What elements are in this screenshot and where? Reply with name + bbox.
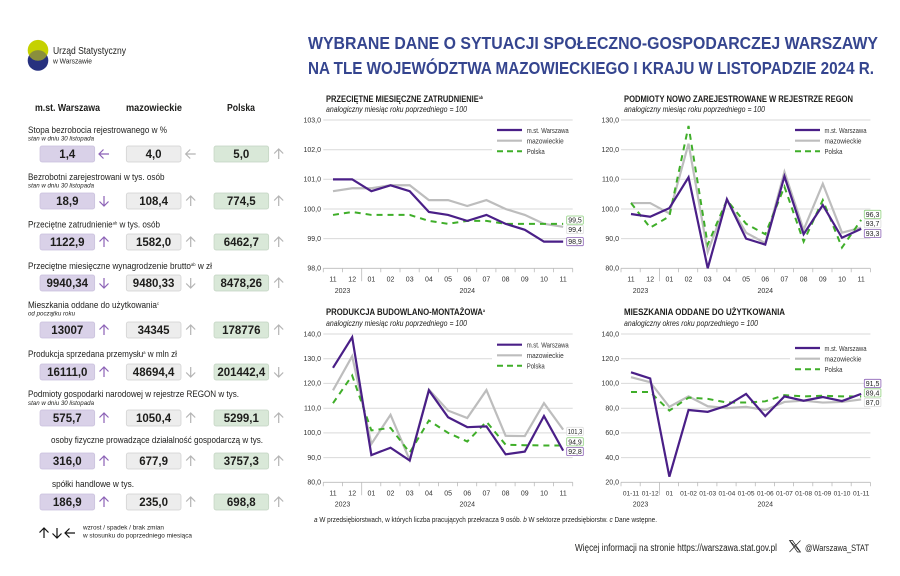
x axis labels: 11 — [858, 276, 865, 284]
x axis labels: 06 — [463, 276, 471, 284]
x axis labels: 05 — [444, 276, 452, 284]
y axis labels: 101,0 — [303, 177, 321, 184]
x axis labels: 01-04 — [718, 490, 736, 498]
chart: produkcja budowlano-montażowa — [303, 307, 583, 508]
chart title: analogiczny okres roku poprzedniego = 100 — [624, 319, 759, 328]
y axis labels: 80,0 — [605, 406, 619, 412]
legend — [497, 126, 569, 156]
row: stopa bezrobocia: stan w dniu 30 listopada — [28, 136, 94, 142]
x axis labels: 2024 — [758, 288, 773, 295]
y axis labels: 103,0 — [303, 117, 321, 124]
row: wynagrodzenie — [28, 261, 283, 291]
row: spółki handlowe: 186,9 — [53, 497, 82, 509]
x axis labels — [329, 490, 567, 508]
row: stopa bezrobocia: 5,0 — [233, 149, 249, 161]
row: bezrobotni: 774,5 — [227, 196, 256, 208]
x axis labels: 03 — [406, 490, 414, 498]
x axis labels: 01-08 — [795, 490, 812, 498]
x axis labels: 2023 — [335, 288, 350, 295]
x axis labels: 02 — [387, 276, 394, 284]
y axis labels: 110,0 — [602, 177, 619, 184]
social handle: @Warszawa_STAT — [805, 543, 869, 553]
legend — [795, 126, 866, 156]
end value labels — [864, 210, 881, 238]
y axis labels: 102,0 — [303, 147, 321, 154]
x axis labels: 01-06 — [757, 490, 774, 498]
y axis labels: 100,0 — [601, 206, 619, 213]
logo — [28, 40, 127, 71]
legend — [497, 340, 569, 370]
row: mieszkania: 34345 — [138, 325, 170, 337]
x axis labels: 09 — [521, 490, 529, 498]
x axis labels: 01-12 — [642, 490, 659, 498]
arrow legend: wzrost / spadek / brak zmian — [82, 524, 164, 532]
chart: przeciętne miesięczne zatrudnienie — [303, 94, 583, 295]
x axis labels: 02 — [387, 490, 394, 498]
row: osoby fizyczne: osoby fizyczne prowadzące działalność gospodarczą w tys. — [51, 435, 263, 445]
y axis labels: 130,0 — [303, 356, 321, 363]
chart: mieszkania oddane do użytkowania — [601, 307, 881, 508]
x axis labels: 01-07 — [776, 490, 793, 498]
y axis labels: 60,0 — [605, 430, 619, 437]
chart title: analogiczny miesiąc roku poprzedniego = 100 — [326, 105, 468, 114]
legend: m.st. Warszawa — [824, 344, 866, 353]
data lines — [333, 337, 563, 461]
row: produkcja sprzedana: 201442,4 — [217, 367, 266, 379]
x axis labels: 09 — [819, 276, 827, 284]
x axis labels: 12 — [646, 276, 654, 284]
legend: mazowieckie — [527, 351, 564, 360]
end value labels: 87,0 — [866, 400, 880, 407]
x axis labels: 02 — [685, 276, 692, 284]
y axis labels: 40,0 — [605, 455, 619, 462]
x axis labels: 03 — [704, 276, 712, 284]
row: spółki handlowe: 235,0 — [139, 497, 168, 509]
row: zatrudnienie — [28, 220, 283, 250]
row: stopa bezrobocia — [28, 125, 283, 162]
y axis labels: 100,0 — [303, 206, 321, 213]
website link: Więcej informacji na stronie https://warszawa.stat.gov.pl — [575, 543, 777, 554]
y axis labels: 100,0 — [303, 430, 321, 437]
x axis labels: 11 — [329, 490, 337, 498]
row: produkcja sprzedana — [28, 349, 283, 380]
row: zatrudnienie: 1122,9 — [50, 237, 85, 249]
x axis labels: 09 — [521, 276, 529, 284]
x axis labels: 01-05 — [738, 490, 755, 498]
row: produkcja sprzedana: Produkcja sprzedana przemysłu — [28, 349, 156, 359]
y axis labels: 120,0 — [303, 381, 321, 388]
x axis labels: 07 — [781, 276, 788, 284]
x axis labels: 01 — [666, 276, 673, 284]
legend: Polska — [824, 147, 842, 156]
x axis labels — [623, 490, 870, 508]
logo: Urząd Statystyczny — [53, 46, 127, 57]
y axis labels: 110,0 — [304, 406, 321, 412]
chart title: PODMIOTY NOWO ZAREJESTROWANE W REJESTRZE REGON — [624, 94, 853, 104]
chart title: ab — [479, 95, 483, 100]
row: podmioty gospodarki: 575,7 — [53, 413, 82, 425]
legend: Polska — [527, 362, 545, 370]
x axis labels: 01-11 — [853, 490, 870, 498]
y axis labels: 80,0 — [605, 266, 619, 273]
chart title: analogiczny miesiąc roku poprzedniego = 100 — [326, 319, 468, 328]
y axis labels — [601, 117, 619, 273]
x axis labels: 08 — [800, 276, 808, 284]
row: wynagrodzenie: w zł — [196, 261, 212, 271]
row: spółki handlowe — [40, 479, 283, 510]
x axis labels: 2023 — [633, 502, 648, 508]
end value labels — [567, 216, 583, 246]
end value labels: 93,3 — [866, 231, 880, 238]
x axis labels: 01-11 — [623, 490, 640, 498]
y axis labels: 80,0 — [307, 480, 321, 487]
x axis labels: 05 — [742, 276, 750, 284]
x axis labels: 01-09 — [814, 490, 832, 498]
y axis labels: 20,0 — [605, 480, 619, 487]
y axis labels: 100,0 — [601, 381, 619, 388]
x axis labels: 01-10 — [834, 490, 851, 498]
row: zatrudnienie: ab — [113, 220, 118, 226]
x axis labels: 05 — [444, 490, 452, 498]
row: wynagrodzenie: 9480,33 — [133, 278, 174, 290]
legend: Polska — [824, 365, 842, 374]
x axis labels: 12 — [348, 490, 356, 498]
end value labels: 99,5 — [568, 218, 582, 225]
row: mieszkania: od początku roku — [28, 311, 75, 318]
row: produkcja sprzedana: w mln zł — [145, 349, 177, 359]
chart title — [624, 307, 785, 328]
x axis labels: 11 — [627, 276, 635, 284]
footnotes: a W przedsiębiorstwach, w których liczba pracujących przekracza 9 osób. b W sektorze przedsiębiorstw. c Dane wstępne. — [314, 517, 657, 524]
x axis labels: 07 — [483, 490, 490, 498]
x axis labels: 01-03 — [699, 490, 716, 498]
legend: mazowieckie — [824, 137, 862, 146]
table column headers: mazowieckie — [126, 103, 182, 114]
y axis labels: 99,0 — [307, 236, 321, 243]
table column headers: Polska — [227, 103, 255, 114]
row: wynagrodzenie: 8478,26 — [221, 278, 262, 290]
end value labels: 91,5 — [866, 381, 880, 388]
legend: mazowieckie — [824, 354, 862, 363]
row: produkcja sprzedana: a — [143, 350, 146, 355]
row: wynagrodzenie: 9940,34 — [47, 278, 89, 290]
row: bezrobotni: 108,4 — [139, 196, 169, 208]
chart title: analogiczny miesiąc roku poprzedniego = 100 — [624, 105, 766, 114]
row: osoby fizyczne: 3757,3 — [224, 456, 259, 468]
end value labels: 99,4 — [568, 227, 582, 234]
x axis labels: 01 — [666, 490, 673, 498]
legend: m.st. Warszawa — [527, 126, 569, 135]
end value labels — [864, 379, 881, 407]
row: zatrudnienie: w tys. osób — [117, 220, 160, 230]
logo: w Warszawie — [52, 56, 92, 66]
row: bezrobotni: 18,9 — [56, 196, 78, 208]
row: podmioty gospodarki: 5299,1 — [224, 413, 259, 425]
legend: Polska — [527, 147, 545, 156]
y axis labels — [303, 331, 321, 487]
row: stopa bezrobocia: 1,4 — [59, 149, 76, 161]
row: mieszkania — [28, 300, 283, 338]
end value labels: 96,3 — [866, 212, 880, 219]
row: bezrobotni — [28, 172, 283, 209]
y axis labels: 140,0 — [601, 331, 619, 338]
row: podmioty gospodarki: stan w dniu 30 listopada — [28, 400, 94, 407]
row: zatrudnienie: Przeciętne zatrudnienie — [28, 220, 122, 230]
row: produkcja sprzedana: 48694,4 — [133, 367, 175, 379]
row: mieszkania: 13007 — [51, 325, 83, 337]
end value labels: 94,9 — [568, 439, 582, 446]
chart: podmioty nowo zarejestrowane — [601, 94, 881, 295]
x axis labels: 12 — [348, 276, 356, 284]
legend — [795, 344, 866, 374]
y axis labels: 98,0 — [307, 266, 321, 273]
chart title: PRZECIĘTNE MIESIĘCZNE ZATRUDNIENIE — [326, 94, 513, 104]
x axis labels: 08 — [502, 490, 510, 498]
x axis labels: 2024 — [758, 502, 773, 508]
data lines — [631, 372, 861, 477]
end value labels: 89,4 — [866, 390, 880, 397]
x axis labels: 10 — [540, 276, 548, 284]
x axis labels: 2023 — [633, 288, 648, 295]
data lines — [333, 179, 563, 242]
row: osoby fizyczne: 316,0 — [53, 456, 82, 468]
end value labels — [567, 427, 583, 456]
x axis labels: 01 — [368, 276, 375, 284]
x axis labels: 03 — [406, 276, 414, 284]
title — [308, 33, 878, 78]
end value labels: 92,8 — [568, 449, 582, 456]
y axis labels: 130,0 — [601, 117, 619, 124]
row: podmioty gospodarki: 1050,4 — [136, 413, 172, 425]
x axis labels: 06 — [761, 276, 769, 284]
x axis labels: 01 — [368, 490, 375, 498]
chart title: MIESZKANIA ODDANE DO UŻYTKOWANIA — [624, 307, 785, 317]
row: produkcja sprzedana: 16111,0 — [47, 367, 87, 379]
x axis labels — [329, 276, 567, 295]
chart title — [624, 94, 853, 114]
row: podmioty gospodarki: Podmioty gospodarki narodowej w rejestrze REGON w tys. — [28, 389, 239, 399]
y axis labels — [601, 331, 619, 487]
row: stopa bezrobocia: Stopa bezrobocia rejestrowanego w % — [28, 125, 167, 135]
y axis labels: 140,0 — [303, 331, 321, 338]
row: spółki handlowe: spółki handlowe w tys. — [52, 479, 134, 489]
x axis labels: 01-02 — [680, 490, 697, 498]
x axis labels: 11 — [560, 276, 567, 284]
y axis labels: 120,0 — [601, 147, 619, 154]
x axis labels: 11 — [560, 490, 567, 498]
icon: X logo — [790, 540, 800, 552]
row: zatrudnienie: 6462,7 — [224, 237, 259, 249]
y axis labels: 90,0 — [605, 236, 619, 243]
x axis labels: 2024 — [460, 502, 475, 508]
end value labels: 101,3 — [568, 429, 582, 436]
x axis labels: 08 — [502, 276, 510, 284]
y axis labels: 90,0 — [307, 455, 321, 462]
row: stopa bezrobocia: 4,0 — [146, 149, 162, 161]
y axis labels: 120,0 — [601, 356, 619, 363]
row: mieszkania: Mieszkania oddane do użytkowania — [28, 300, 170, 310]
end value labels: 98,9 — [568, 239, 582, 246]
x axis labels: 04 — [723, 276, 731, 284]
x axis labels: 06 — [463, 490, 471, 498]
row: bezrobotni: Bezrobotni zarejestrowani w tys. osób — [28, 172, 164, 182]
row: mieszkania: c — [157, 301, 160, 306]
x axis labels: 10 — [838, 276, 846, 284]
x axis labels: 2023 — [335, 502, 350, 508]
chart title — [326, 307, 485, 328]
legend: m.st. Warszawa — [527, 340, 569, 350]
x axis labels: 04 — [425, 276, 433, 284]
x axis labels: 04 — [425, 490, 433, 498]
x axis labels: 07 — [483, 276, 490, 284]
row: wynagrodzenie: ab — [191, 262, 196, 267]
x axis labels: 10 — [540, 490, 548, 498]
table column headers: m.st. Warszawa — [35, 103, 100, 114]
row: spółki handlowe: 698,8 — [227, 497, 256, 509]
row: podmioty gospodarki — [28, 389, 283, 426]
end value labels: 93,7 — [866, 221, 880, 228]
x axis labels: 2024 — [460, 288, 475, 295]
arrow legend — [40, 524, 192, 540]
row: bezrobotni: stan w dniu 30 listopada — [28, 182, 94, 189]
chart title: PRODUKCJA BUDOWLANO-MONTAŻOWA — [326, 307, 512, 317]
y axis labels — [303, 117, 321, 273]
row: mieszkania: 178776 — [222, 325, 260, 337]
data lines — [631, 126, 861, 268]
x axis labels — [627, 276, 865, 295]
x axis labels: 11 — [329, 276, 337, 284]
legend: m.st. Warszawa — [824, 126, 866, 135]
legend: mazowieckie — [527, 137, 564, 146]
row: osoby fizyczne — [40, 435, 283, 469]
arrow legend: w stosunku do poprzedniego miesiąca — [82, 532, 192, 540]
table column headers — [35, 103, 255, 114]
chart title — [326, 94, 483, 114]
row: wynagrodzenie: Przeciętne miesięczne wynagrodzenie brutto — [28, 261, 207, 271]
chart title: a — [483, 308, 485, 313]
row: osoby fizyczne: 677,9 — [139, 456, 168, 468]
row: zatrudnienie: 1582,0 — [136, 237, 171, 249]
